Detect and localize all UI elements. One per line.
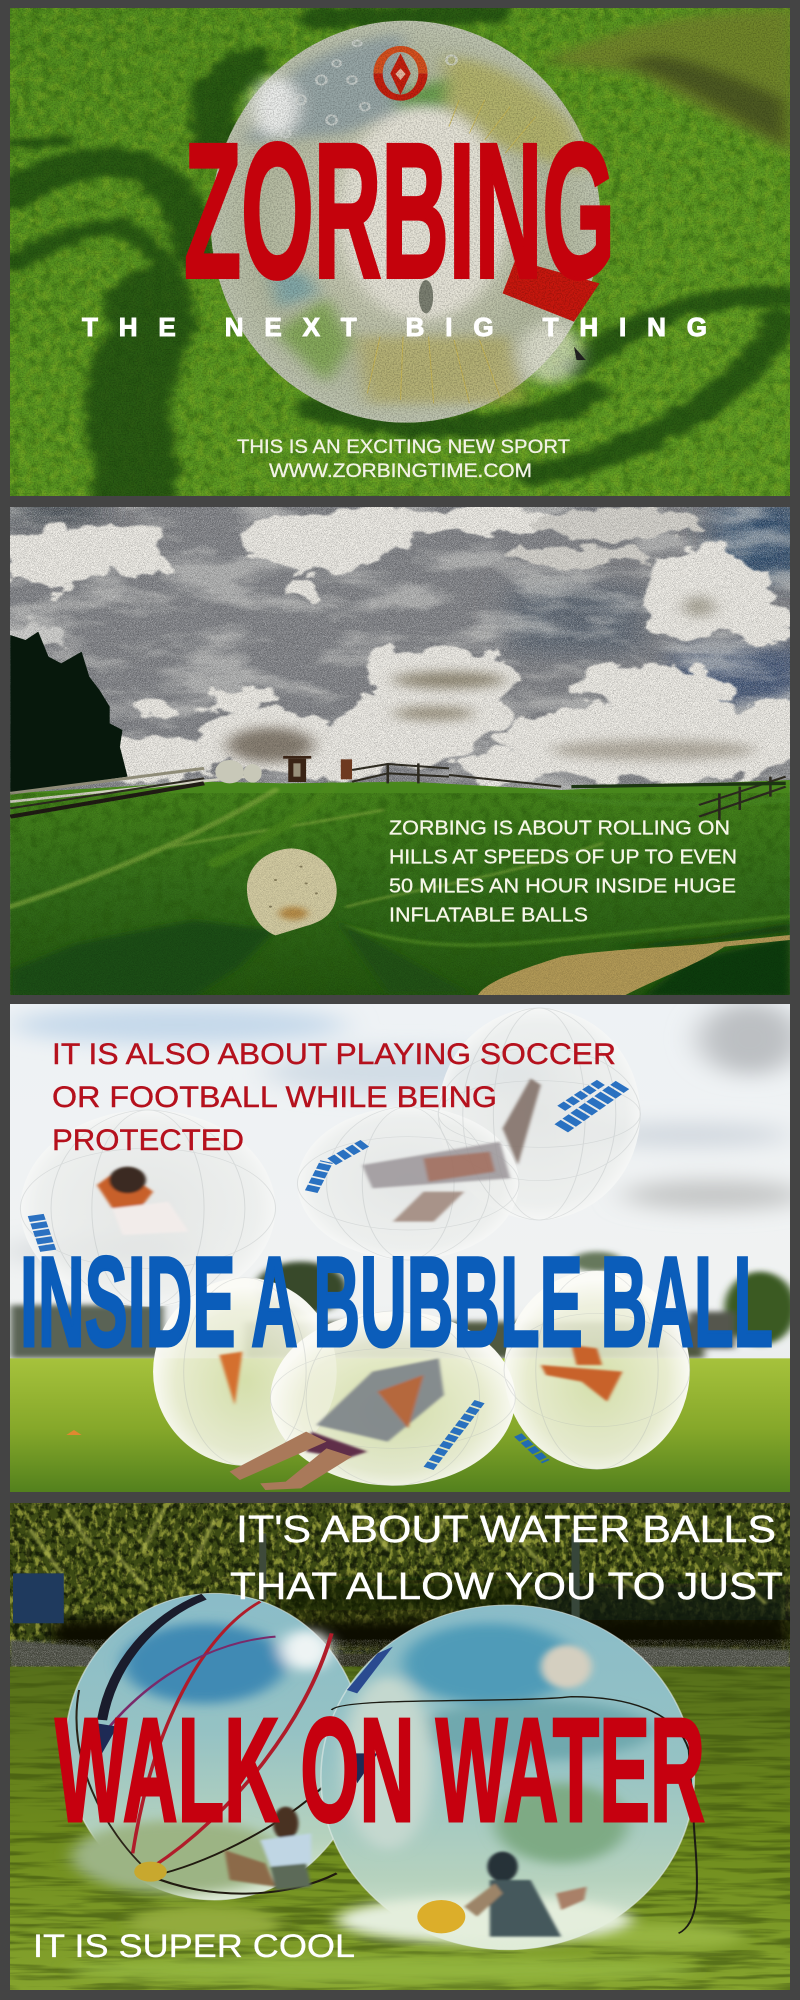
zorb ball: [211, 21, 601, 423]
text block: what zorbing is: [389, 818, 737, 926]
text block: water balls: IT'S ABOUT WATER BALLS: [236, 1509, 776, 1551]
clouds: [0, 505, 800, 783]
blue logos on the balls: [36, 1082, 622, 1468]
compass logo: [373, 46, 428, 101]
left water ball: [65, 1593, 363, 1900]
panel: zorbing hero: [0, 0, 800, 507]
ball rolling down the hill: [247, 848, 337, 935]
panel: water balls: [0, 1490, 800, 1993]
text block: intro and website: THIS IS AN EXCITING NEW SPORT: [237, 437, 570, 458]
grassy hill: [10, 780, 790, 997]
text block: water balls: THAT ALLOW YOU TO JUST: [230, 1566, 783, 1608]
players inside the balls: [66, 1078, 622, 1490]
girl in left ball: [224, 1807, 311, 1890]
bubble balls: [20, 1008, 690, 1486]
text block: what zorbing is: INFLATABLE BALLS: [389, 904, 588, 926]
photo: sky, clouds and green hill with ball: [0, 500, 800, 1000]
text block: water balls: [230, 1509, 783, 1608]
panel: rolling on hills: [0, 500, 800, 1000]
text block: what zorbing is: HILLS AT SPEEDS OF UP TO EVEN: [389, 846, 737, 868]
lake water: [0, 1667, 800, 1993]
right water ball: [321, 1605, 697, 1950]
ball seams: [20, 1008, 690, 1486]
text block: what zorbing is: ZORBING IS ABOUT ROLLING ON: [389, 818, 730, 840]
fence: [10, 763, 786, 820]
ball air holes and seams: [281, 40, 457, 137]
text block: what zorbing is: 50 MILES AN HOUR INSIDE HUGE: [389, 876, 736, 898]
text block: playing soccer protected: OR FOOTBALL WHILE BEING: [52, 1081, 497, 1114]
subtitle: the next big thing: THE NEXT BIG THING: [82, 312, 707, 342]
text block: intro and website: [237, 437, 570, 482]
tree line: [10, 632, 128, 793]
panel: bubble soccer: [0, 995, 800, 1498]
foliage background: [0, 1490, 800, 1670]
distant trees: [10, 1252, 796, 1358]
text block: playing soccer protected: IT IS ALSO ABOUT PLAYING SOCCER: [52, 1038, 616, 1071]
dirt path: [477, 935, 790, 997]
text block: playing soccer protected: PROTECTED: [52, 1124, 244, 1157]
rocky bank: [10, 1640, 790, 1667]
grass field: [0, 1358, 800, 1498]
text block: super cool: IT IS SUPER COOL: [33, 1928, 355, 1964]
photo: two water walking balls on a lake: [0, 1490, 800, 1993]
photo: clear zorb ball on grassy hills: [0, 0, 800, 507]
text block: intro and website: WWW.ZORBINGTIME.COM: [269, 461, 532, 482]
girl in right ball: [464, 1852, 587, 1937]
text block: playing soccer protected: [52, 1038, 616, 1157]
photo: players in bubble balls on a field: [0, 995, 800, 1498]
